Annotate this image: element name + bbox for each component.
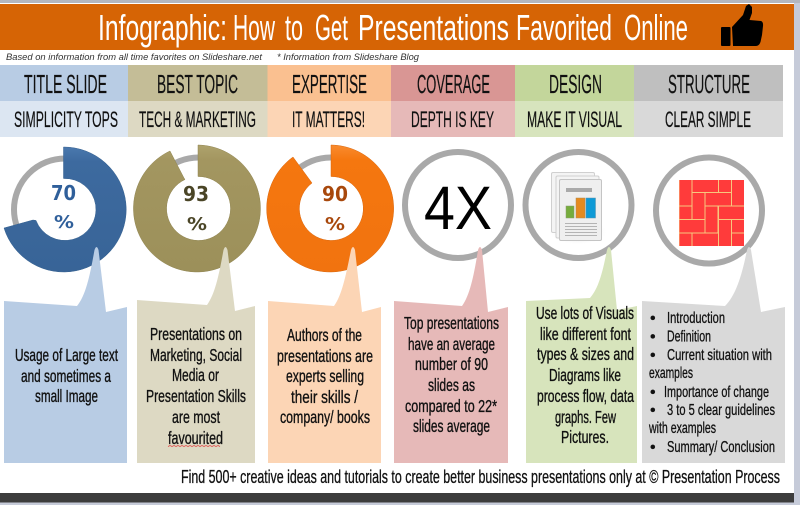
title: How bbox=[233, 7, 276, 48]
header: coverage: DEPTH IS KEY bbox=[411, 107, 494, 132]
callout: coverage bbox=[394, 247, 508, 463]
header: best topic: BEST TOPIC bbox=[157, 69, 238, 99]
icon: thumbs up bbox=[721, 4, 763, 46]
source notes: Based on information from all time favorites on Slideshare.net bbox=[6, 52, 262, 63]
header: best topic bbox=[128, 65, 268, 137]
callout: design: types & sizes and bbox=[537, 344, 634, 364]
donut chart: 90%: 90 bbox=[322, 182, 348, 206]
callout: expertise: their skills / bbox=[291, 387, 358, 407]
callout: title slide: and sometimes a bbox=[21, 366, 111, 386]
callout: structure: with examples bbox=[648, 420, 716, 437]
callout: structure: • bbox=[650, 347, 656, 364]
title: Get bbox=[315, 7, 348, 48]
callout: design: Use lots of Visuals bbox=[536, 303, 634, 323]
callout: design: like different font bbox=[540, 324, 631, 344]
donut chart: 93%: % bbox=[187, 214, 207, 235]
callout: coverage: Top presentations bbox=[404, 313, 499, 333]
header: coverage bbox=[391, 65, 515, 137]
source notes bbox=[6, 52, 420, 63]
ring: document chart icon bbox=[526, 152, 632, 258]
callout: best topic bbox=[137, 247, 255, 463]
callout: title slide: Usage of Large text bbox=[15, 345, 118, 365]
callout: design: process flow, data bbox=[537, 386, 634, 406]
title: Favorited bbox=[516, 7, 612, 48]
callout: structure: • bbox=[650, 328, 656, 346]
callout: expertise: presentations are bbox=[277, 346, 373, 366]
callout: design: Pictures. bbox=[561, 427, 609, 447]
header: title slide: TITLE SLIDE bbox=[24, 69, 107, 99]
header: best topic: TECH & MARKETING bbox=[139, 107, 256, 132]
title banner bbox=[0, 4, 794, 50]
callout: coverage: have an average bbox=[408, 334, 495, 354]
callout: best topic: Presentation Skills bbox=[146, 386, 246, 406]
callout: design: Diagrams like bbox=[549, 365, 621, 385]
header: title slide: SIMPLICITY TOPS bbox=[14, 107, 118, 132]
callout: structure: • bbox=[650, 402, 656, 419]
callout: coverage: slides as bbox=[428, 375, 475, 395]
header: expertise: EXPERTISE bbox=[292, 69, 367, 99]
callout: title slide bbox=[4, 247, 127, 463]
callout: structure: Introduction bbox=[667, 310, 725, 327]
title: to bbox=[285, 7, 303, 48]
callout: structure: • bbox=[650, 439, 656, 456]
callout: structure bbox=[642, 247, 785, 463]
callout: design: graphs. Few bbox=[555, 407, 616, 427]
donut chart: 90%: % bbox=[325, 214, 345, 235]
donut chart: 93% bbox=[133, 145, 260, 272]
ring: 4X bbox=[405, 152, 511, 258]
title: Presentations bbox=[358, 7, 509, 48]
header: design bbox=[515, 65, 634, 137]
callout: best topic: Marketing, Social bbox=[150, 345, 242, 365]
callout: best topic: Media or bbox=[172, 365, 219, 385]
donut chart: 70%: % bbox=[54, 212, 74, 233]
header: title slide bbox=[0, 65, 128, 137]
callout: title slide: small Image bbox=[35, 386, 98, 406]
title: Infographic: bbox=[98, 7, 227, 48]
title: Online bbox=[624, 7, 688, 48]
callout: structure: Definition bbox=[667, 328, 711, 346]
callout: design bbox=[526, 247, 637, 463]
callout: expertise: experts selling bbox=[286, 366, 364, 386]
ring: brick pattern icon bbox=[656, 158, 762, 264]
donut chart: 70% bbox=[4, 147, 126, 272]
callout: best topic: Presentations on bbox=[150, 324, 242, 344]
callout: expertise: Authors of the bbox=[287, 325, 362, 345]
donut chart: 93%: 93 bbox=[183, 182, 209, 206]
callout: best topic: favourited bbox=[168, 428, 223, 448]
ring: 4X: 4X bbox=[424, 174, 492, 242]
donut chart: 70%: 70 bbox=[51, 181, 76, 205]
callout: coverage: number of 90 bbox=[415, 354, 488, 374]
callout: structure: examples bbox=[649, 365, 693, 382]
header: design: MAKE IT VISUAL bbox=[527, 107, 622, 132]
callout: best topic: are most bbox=[172, 407, 220, 427]
callout: structure: • bbox=[650, 384, 656, 401]
header: coverage: COVERAGE bbox=[417, 69, 490, 99]
donut chart: 90% bbox=[267, 145, 394, 272]
header: design: DESIGN bbox=[549, 69, 602, 99]
callout: coverage: compared to 22* bbox=[405, 396, 497, 416]
source notes: * Information from Slideshare Blog bbox=[277, 52, 420, 63]
callout: structure: • bbox=[650, 310, 656, 327]
header: expertise bbox=[268, 65, 391, 137]
callout: expertise bbox=[268, 247, 381, 463]
callout: coverage: slides average bbox=[413, 416, 490, 436]
header: structure bbox=[634, 65, 783, 137]
callout: expertise: company/ books bbox=[280, 407, 370, 427]
header: expertise: IT MATTERS! bbox=[292, 107, 365, 132]
